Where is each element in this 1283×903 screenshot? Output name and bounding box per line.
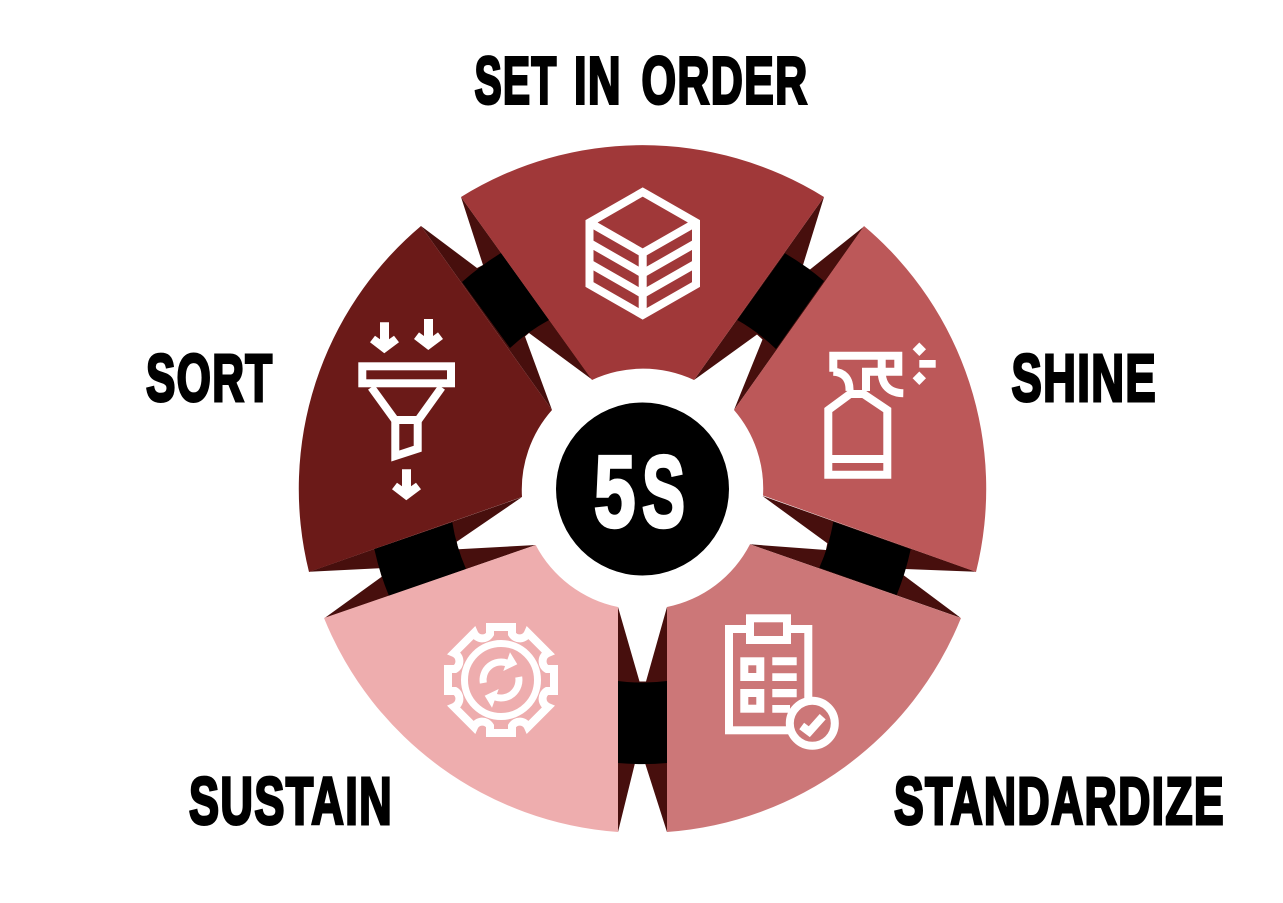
panel: sustain segment xyxy=(324,545,618,832)
panel: standardize segment xyxy=(667,544,961,832)
connector: set in order to shine xyxy=(694,197,864,410)
icon: spray bottle xyxy=(828,342,936,475)
panel: sort segment xyxy=(299,226,552,572)
heading: set in order: ORDER xyxy=(642,44,808,118)
heading: sort: SORT xyxy=(146,341,274,416)
center label 5S: 5 xyxy=(594,436,636,548)
connector: sustain to sort xyxy=(309,497,536,618)
icon: clipboard with check xyxy=(729,618,835,746)
heading: set in order xyxy=(474,44,808,118)
icon: funnel with arrows xyxy=(362,319,451,500)
connector: sort to set in order xyxy=(421,197,592,410)
panel: set in order segment xyxy=(461,145,824,380)
center label 5S: S xyxy=(642,436,685,548)
center circle xyxy=(556,402,729,576)
connector: shine to standardize xyxy=(750,496,976,618)
heading: set in order: IN xyxy=(574,44,622,118)
heading: shine: SHINE xyxy=(1012,341,1157,416)
icon: gear with cycle arrows xyxy=(448,627,554,733)
icon: stacked cube xyxy=(590,192,696,315)
heading: set in order: SET xyxy=(474,44,558,118)
heading: sustain: SUSTAIN xyxy=(189,764,393,839)
center label 5S xyxy=(594,436,685,548)
connector: standardize to sustain xyxy=(618,607,667,832)
panel: shine segment xyxy=(734,226,986,572)
